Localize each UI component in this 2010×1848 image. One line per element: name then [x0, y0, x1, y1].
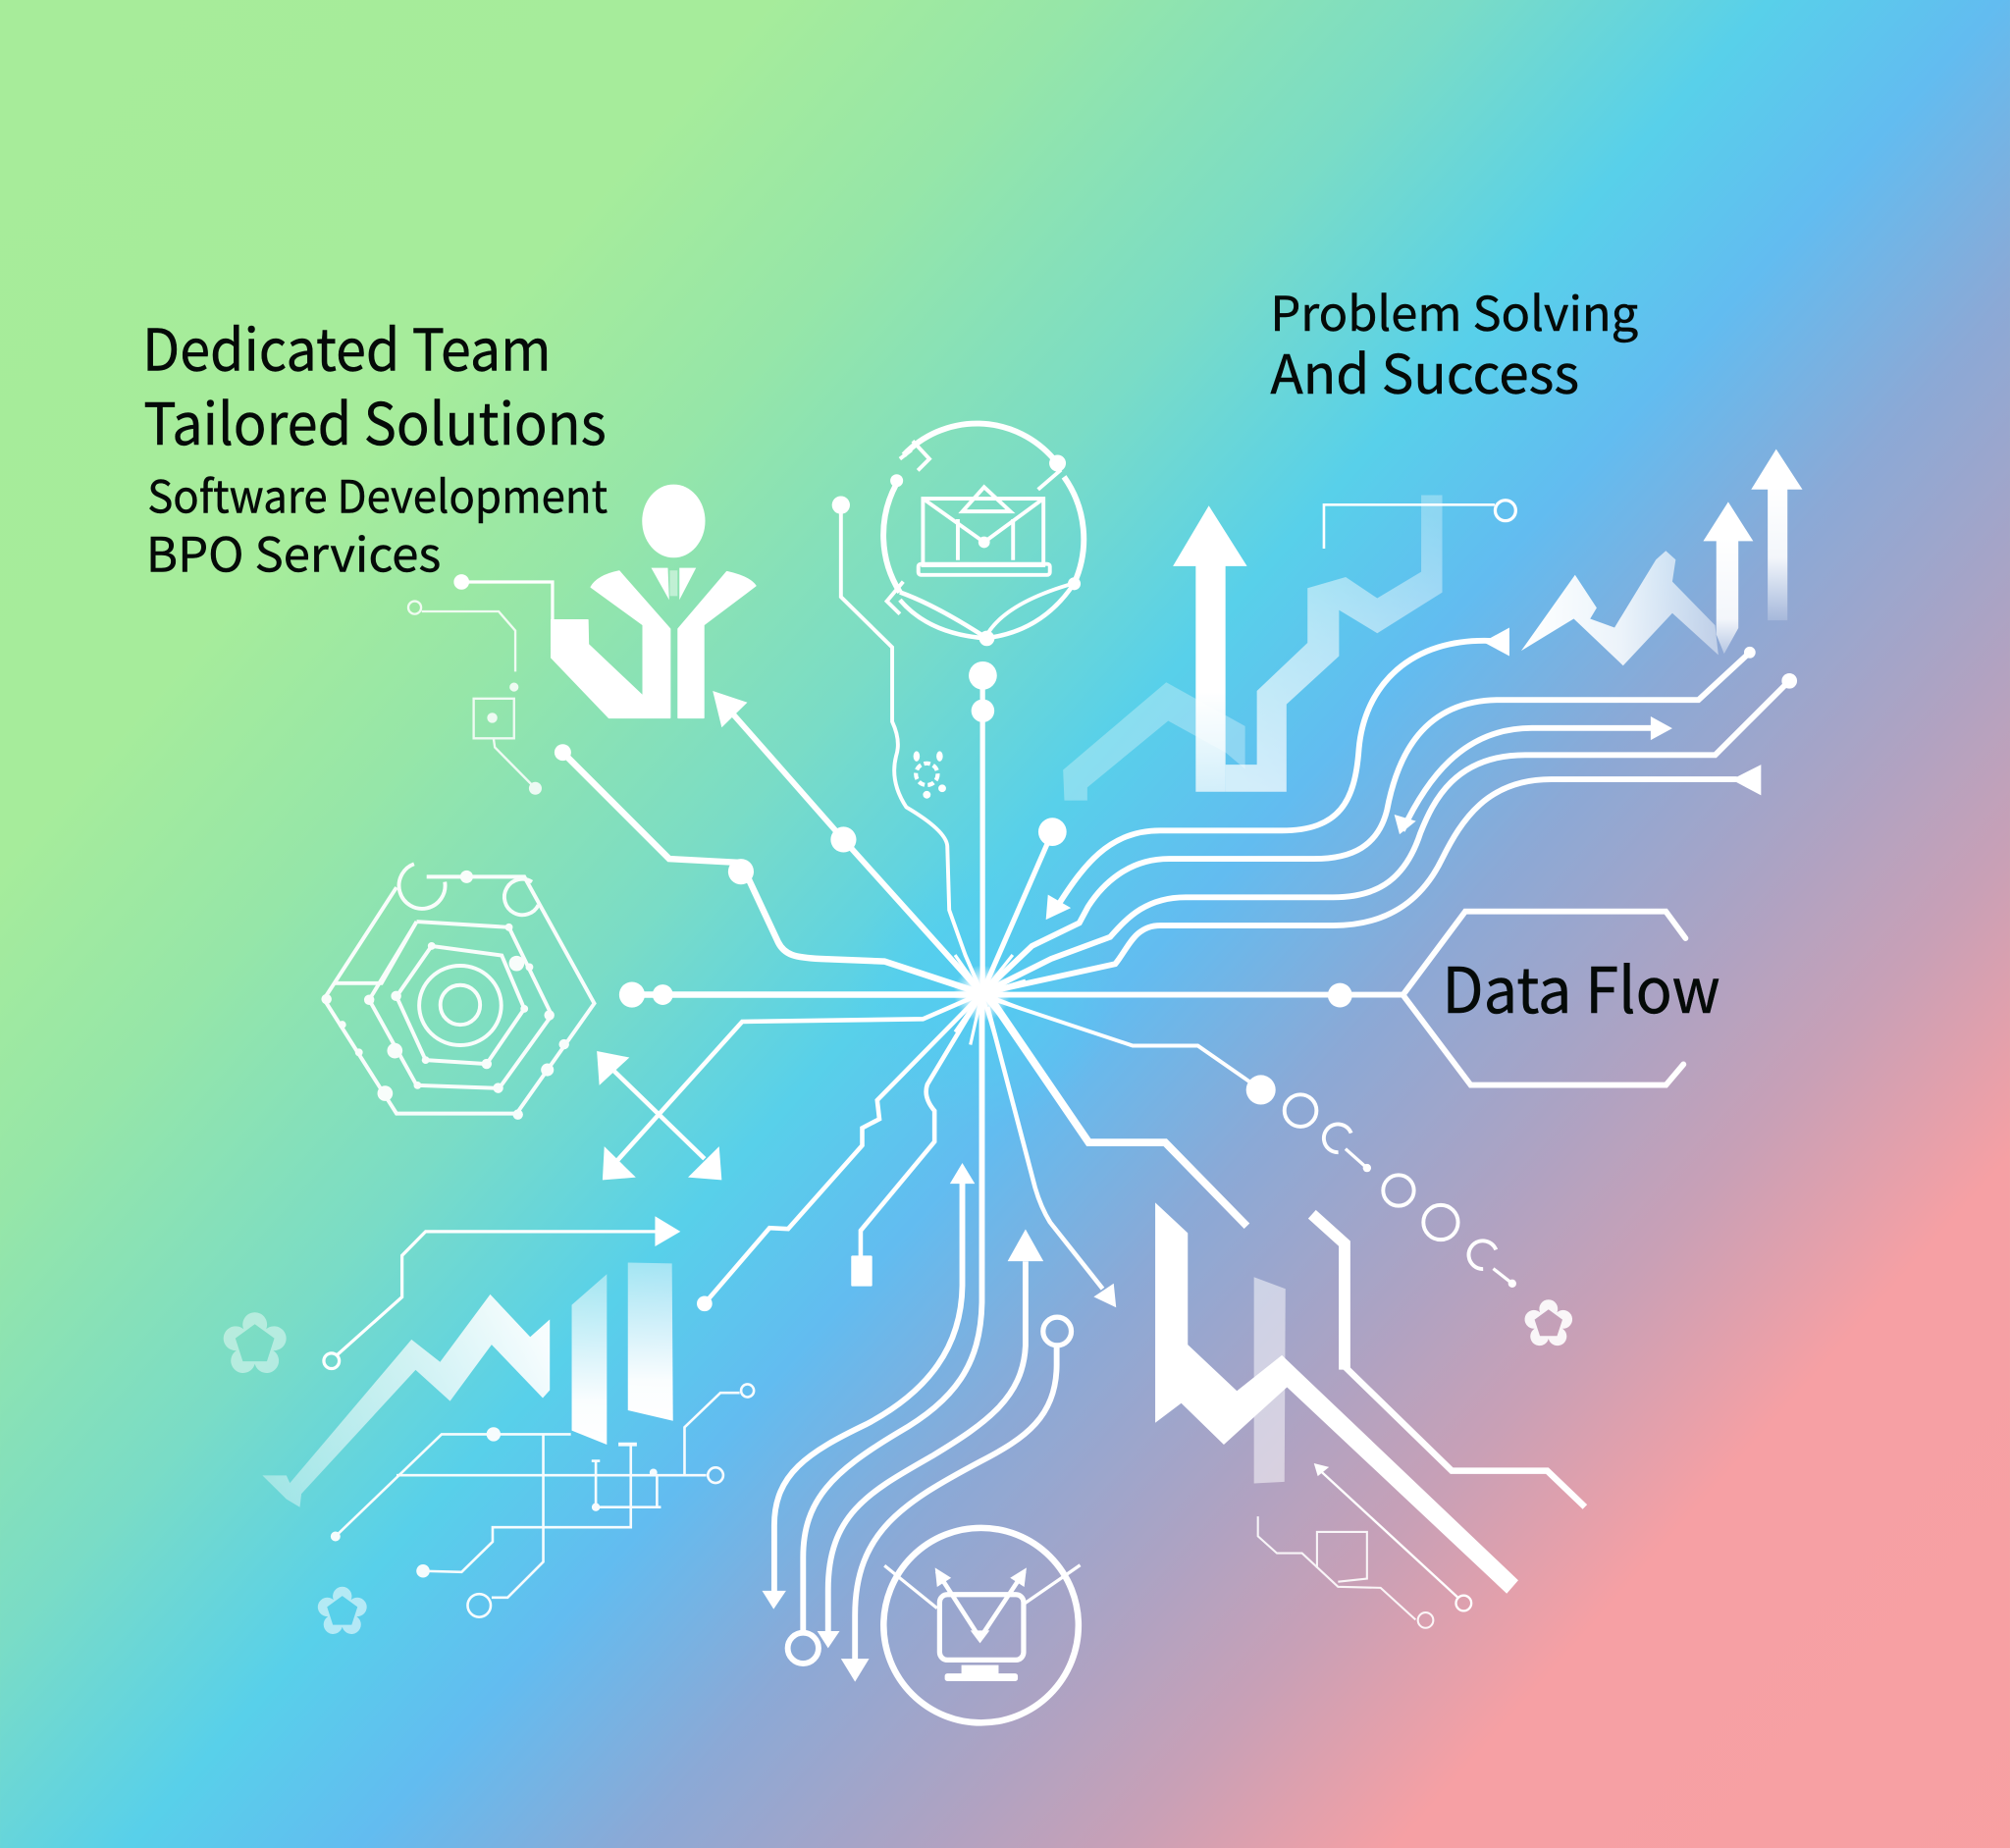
curve: arrow into arrow lower left [1046, 627, 1509, 920]
chart: lower right zigzag [1155, 1202, 1518, 1594]
curve: ring to large down arrow [841, 1317, 1072, 1682]
connector: top stem with nodes [969, 661, 997, 993]
hub: central starburst [942, 955, 1026, 1044]
circuit: lower right with square [1258, 1516, 1433, 1628]
curve: up arrow to down arrow [818, 1230, 1043, 1648]
small circuit with square node [408, 602, 542, 795]
connector: wiggly left of stem [832, 496, 981, 993]
flow lines: upper right curves [981, 627, 1797, 993]
flow arrows: bottom curves [762, 993, 1072, 1682]
curve: double arrow [1395, 716, 1672, 834]
text: Dedicated Team: Dedicated Team [142, 303, 552, 387]
connector: thin line with ring top right [1324, 501, 1515, 549]
circuit: lower-left traces [331, 1384, 754, 1617]
icon: small gear dots [914, 751, 946, 799]
text: BPO Services: BPO Services [146, 517, 441, 586]
icon: hexagon target [321, 864, 595, 1120]
connector: left horizontal with nodes [619, 981, 981, 1008]
heading: problem solving text block [1270, 276, 1638, 409]
chart: zigzag trend with bars [262, 1263, 673, 1507]
text: Problem Solving: Problem Solving [1270, 276, 1638, 344]
connector: dotted chain to right [987, 997, 1516, 1288]
curve: arrow up and down left [762, 1163, 975, 1610]
chart: right zigzag with up arrows [1521, 449, 1803, 665]
connector: lower-left stepped line with dot [697, 993, 981, 1311]
connector: plug line [851, 993, 981, 1287]
connector: dot to hub [981, 818, 1067, 993]
icon: monitor in circle [883, 1528, 1081, 1722]
icon: laptop envelope in circle [883, 424, 1084, 646]
connector: person to left node [453, 574, 553, 620]
connector: thick bent line [989, 997, 1246, 1226]
icon: flower left lower [318, 1587, 367, 1634]
arrow: hub to lower right [987, 1007, 1116, 1307]
curve: dot right to hub [981, 673, 1797, 993]
hub glow [847, 859, 1117, 1128]
curve: centre stem to ring [788, 993, 981, 1663]
icon: crossed double arrows [597, 993, 981, 1180]
icon: flower right [1524, 1299, 1572, 1346]
text: Tailored Solutions: Tailored Solutions [143, 378, 607, 461]
arrow: big up arrow with step chart [1063, 496, 1443, 801]
connector: right stepped line [1312, 1214, 1585, 1506]
label: data flow hexagon [987, 912, 1720, 1085]
curve: dot to hub [981, 647, 1756, 993]
connector: upper-left bent line [555, 744, 981, 993]
text: And Success: And Success [1270, 331, 1579, 409]
arrow: trend line over chart [324, 1216, 680, 1369]
icon: person in suit [552, 485, 756, 717]
curve: arrow right to hub [987, 765, 1761, 992]
arrow: thin arrow with ring [1314, 1463, 1471, 1610]
text: Software Development: Software Development [147, 461, 608, 526]
text: Data Flow: Data Flow [1442, 941, 1720, 1031]
arrow: hub to person [713, 691, 981, 993]
icon: flower left upper [224, 1312, 287, 1373]
heading: services text block [142, 303, 608, 586]
